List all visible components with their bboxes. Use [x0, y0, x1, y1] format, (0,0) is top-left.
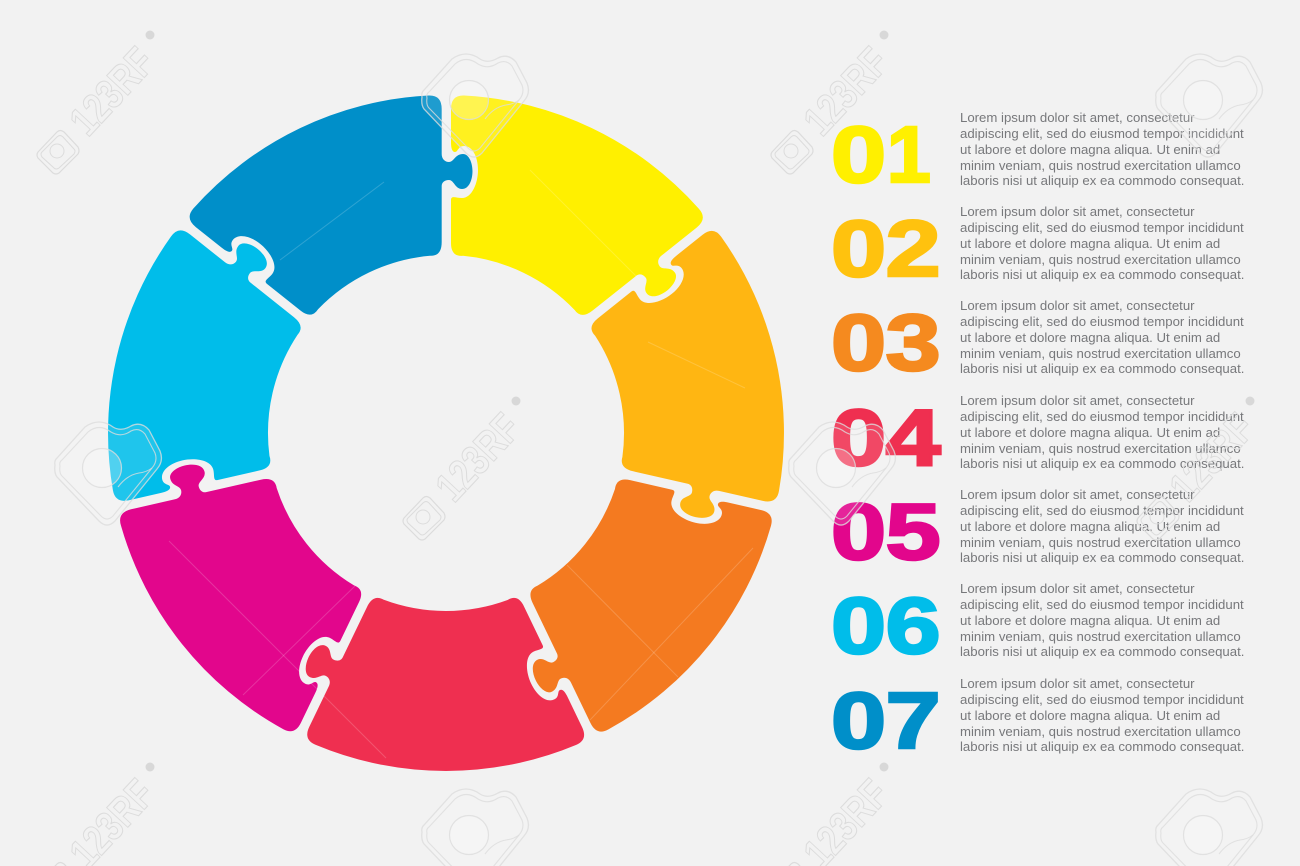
number 01 — [831, 110, 930, 199]
text 07 — [960, 676, 1244, 754]
piece 1: yellow — [451, 95, 703, 315]
text 05: minim veniam, quis nostrud exercitation ullamco — [960, 535, 1241, 550]
text 06: minim veniam, quis nostrud exercitation ullamco — [960, 629, 1241, 644]
item 06 — [831, 581, 1244, 670]
piece 2: amber — [541, 226, 870, 560]
text 01: adipiscing elit, sed do eiusmod tempor incididunt — [960, 126, 1244, 141]
text 06: Lorem ipsum dolor sit amet, consectetur — [960, 581, 1195, 596]
piece 7: blue — [185, 22, 514, 355]
text 07: minim veniam, quis nostrud exercitation ullamco — [960, 724, 1241, 739]
text 06 — [960, 581, 1244, 659]
text 03 — [960, 298, 1244, 376]
text 07: laboris nisi ut aliquip ex ea commodo consequat. — [960, 739, 1244, 754]
number and text list — [831, 110, 1244, 765]
text 01 — [960, 110, 1244, 188]
number 07: 07 — [831, 676, 940, 765]
text 02: ut labore et dolore magna aliqua. Ut enim ad — [960, 236, 1220, 251]
text 05: laboris nisi ut aliquip ex ea commodo consequat. — [960, 550, 1244, 565]
text 03: laboris nisi ut aliquip ex ea commodo consequat. — [960, 361, 1244, 376]
number 04: 04 — [831, 393, 940, 482]
text 04: minim veniam, quis nostrud exercitation ullamco — [960, 441, 1241, 456]
text 05: Lorem ipsum dolor sit amet, consectetur — [960, 487, 1195, 502]
text 05: adipiscing elit, sed do eiusmod tempor incididunt — [960, 503, 1244, 518]
text 04: adipiscing elit, sed do eiusmod tempor incididunt — [960, 409, 1244, 424]
text 04 — [960, 393, 1244, 471]
item 03 — [831, 298, 1244, 387]
number 06: 06 — [831, 581, 940, 670]
text 07: Lorem ipsum dolor sit amet, consectetur — [960, 676, 1195, 691]
text 02: adipiscing elit, sed do eiusmod tempor incididunt — [960, 220, 1244, 235]
text 02: laboris nisi ut aliquip ex ea commodo consequat. — [960, 267, 1244, 282]
item 04 — [831, 393, 1244, 482]
number 01: 0 — [831, 110, 886, 199]
text 06: ut labore et dolore magna aliqua. Ut enim ad — [960, 613, 1220, 628]
text 06: adipiscing elit, sed do eiusmod tempor incididunt — [960, 597, 1244, 612]
text 01: ut labore et dolore magna aliqua. Ut enim ad — [960, 142, 1220, 157]
text 03: ut labore et dolore magna aliqua. Ut enim ad — [960, 330, 1220, 345]
number 03: 03 — [831, 298, 940, 387]
text 03: adipiscing elit, sed do eiusmod tempor incididunt — [960, 314, 1244, 329]
piece 6: cyan — [60, 209, 330, 503]
text 05: ut labore et dolore magna aliqua. Ut enim ad — [960, 519, 1220, 534]
text 04: laboris nisi ut aliquip ex ea commodo consequat. — [960, 456, 1244, 471]
text 01: Lorem ipsum dolor sit amet, consectetur — [960, 110, 1195, 125]
text 03: minim veniam, quis nostrud exercitation ullamco — [960, 346, 1241, 361]
number 02: 02 — [831, 204, 940, 293]
text 03: Lorem ipsum dolor sit amet, consectetur — [960, 298, 1195, 313]
item 02 — [831, 204, 1244, 293]
item 01 — [831, 110, 1244, 199]
text 02 — [960, 204, 1244, 282]
piece 3: orange — [504, 464, 774, 759]
text 01: minim veniam, quis nostrud exercitation ullamco — [960, 158, 1241, 173]
piece 4: red — [266, 542, 588, 849]
text 07: adipiscing elit, sed do eiusmod tempor incididunt — [960, 692, 1244, 707]
text 04: ut labore et dolore magna aliqua. Ut enim ad — [960, 425, 1220, 440]
piece 5: magenta — [68, 428, 390, 735]
number 05: 05 — [831, 487, 940, 576]
text 06: laboris nisi ut aliquip ex ea commodo consequat. — [960, 644, 1244, 659]
item 05 — [831, 487, 1244, 576]
item 07 — [831, 676, 1244, 765]
faint guide lines over the pieces — [169, 170, 753, 758]
text 04: Lorem ipsum dolor sit amet, consectetur — [960, 393, 1195, 408]
text 02: Lorem ipsum dolor sit amet, consectetur — [960, 204, 1195, 219]
text 07: ut labore et dolore magna aliqua. Ut enim ad — [960, 708, 1220, 723]
text 02: minim veniam, quis nostrud exercitation ullamco — [960, 252, 1241, 267]
text 05 — [960, 487, 1244, 565]
text 01: laboris nisi ut aliquip ex ea commodo consequat. — [960, 173, 1244, 188]
number 01: 1 — [887, 110, 930, 199]
